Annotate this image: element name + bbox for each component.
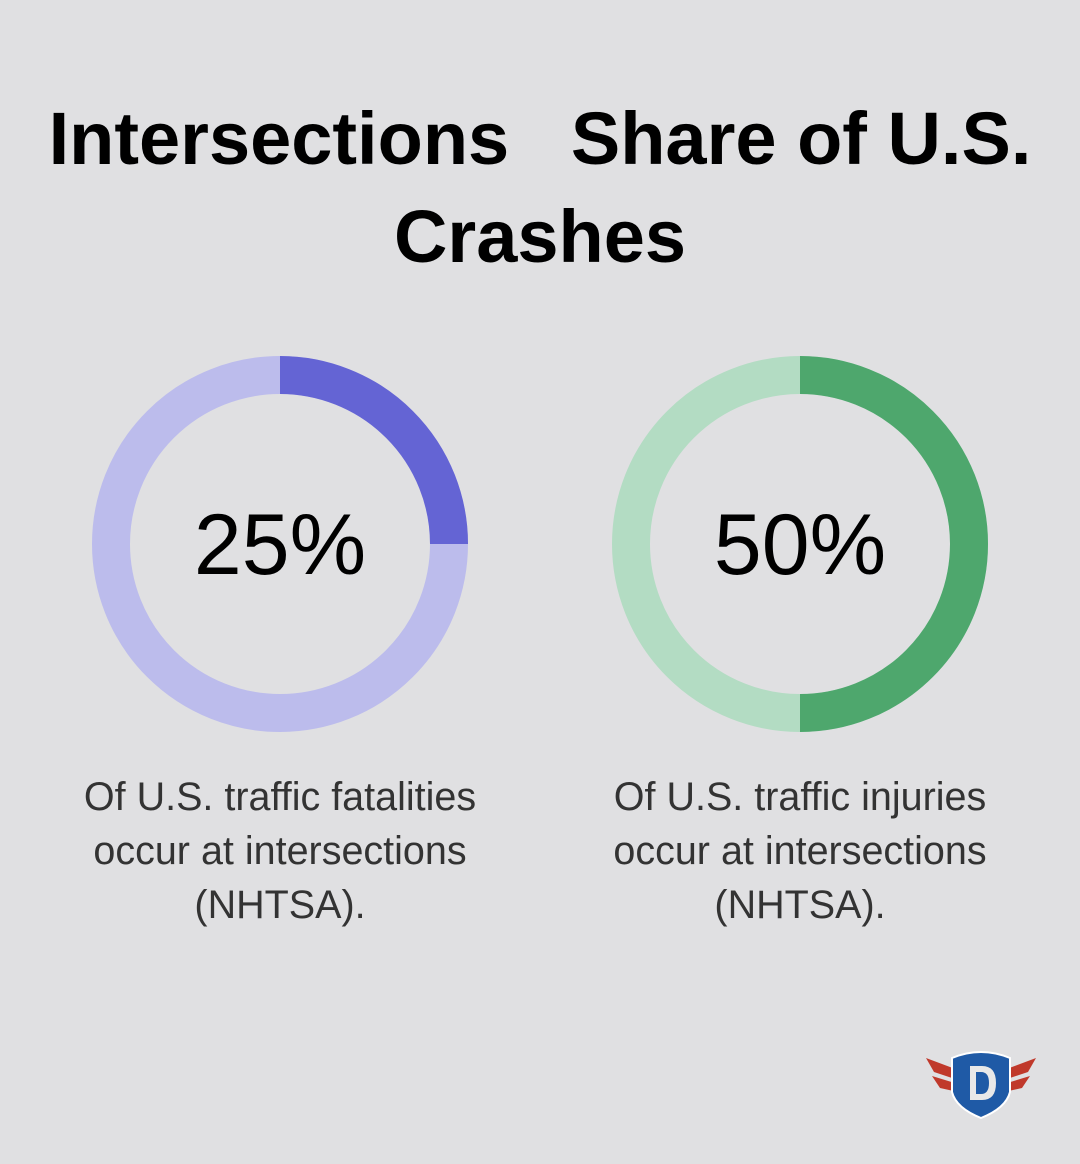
title (49, 97, 1031, 278)
donut: 50% injuries (631, 375, 969, 713)
donut: 25% fatalities (111, 375, 449, 713)
caption: fatalities (84, 775, 476, 927)
icon: logo shield (926, 1052, 1036, 1118)
caption: fatalities: Of U.S. traffic fatalities (84, 775, 476, 819)
title: Intersections Share of U.S. (49, 97, 1031, 180)
caption: injuries (613, 775, 987, 927)
donut: 50% injuries: 50% (714, 497, 886, 593)
caption: fatalities: (NHTSA). (194, 883, 366, 927)
caption: fatalities: occur at intersections (93, 829, 467, 873)
caption: injuries: occur at intersections (613, 829, 987, 873)
caption: injuries: (NHTSA). (714, 883, 886, 927)
donut: 25% fatalities: 25% (194, 497, 366, 593)
title: Crashes (394, 195, 686, 278)
caption: injuries: Of U.S. traffic injuries (614, 775, 986, 819)
